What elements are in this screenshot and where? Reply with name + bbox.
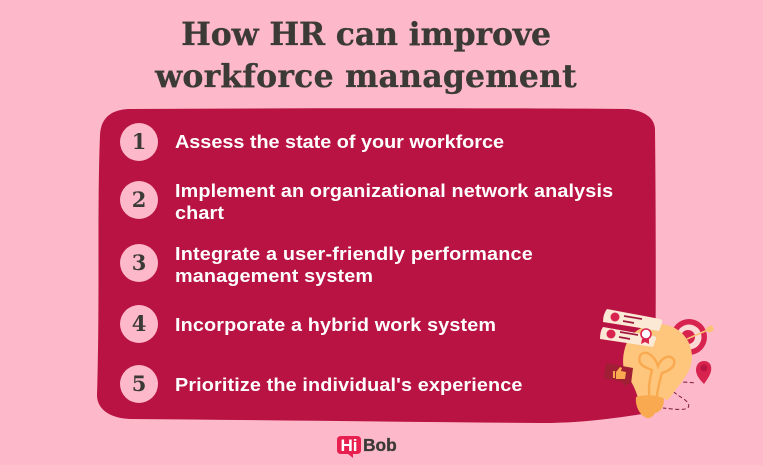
step 4: 4 bbox=[132, 311, 146, 336]
title bbox=[154, 16, 577, 95]
step 3: management system bbox=[175, 266, 373, 286]
step 1: 1 bbox=[132, 129, 146, 154]
title: How HR can improve bbox=[181, 16, 551, 53]
step 2: 2 bbox=[132, 187, 146, 212]
icon: thumbs up bubble bbox=[604, 363, 633, 387]
dashed route bbox=[663, 382, 696, 409]
logo mark bbox=[337, 436, 361, 458]
logo wordmark: Bob bbox=[363, 435, 397, 455]
icon: target bbox=[671, 319, 714, 355]
step 1 bbox=[120, 123, 504, 161]
step 2 bbox=[120, 181, 613, 223]
title: workforce management bbox=[155, 58, 577, 95]
badge card top bbox=[603, 309, 662, 331]
step 1: Assess the state of your workforce bbox=[175, 132, 504, 152]
logo mark: Hi bbox=[340, 436, 358, 455]
step 2: chart bbox=[175, 203, 224, 223]
step 4 bbox=[120, 305, 496, 343]
logo: HiBob bbox=[337, 435, 397, 458]
step 5: Prioritize the individual's experience bbox=[175, 375, 523, 395]
step 3: Integrate a user-friendly performance bbox=[175, 244, 533, 264]
step 2: Implement an organizational network analysis bbox=[175, 181, 613, 201]
step 4: Incorporate a hybrid work system bbox=[175, 315, 496, 335]
icon: map pin bbox=[696, 361, 711, 384]
step 3 bbox=[120, 244, 533, 286]
step 5 bbox=[120, 365, 523, 403]
icon: light bulb bbox=[623, 324, 692, 418]
badge card bottom with ribbon bbox=[600, 327, 656, 347]
step 5: 5 bbox=[132, 371, 146, 396]
step 3: 3 bbox=[132, 250, 146, 275]
